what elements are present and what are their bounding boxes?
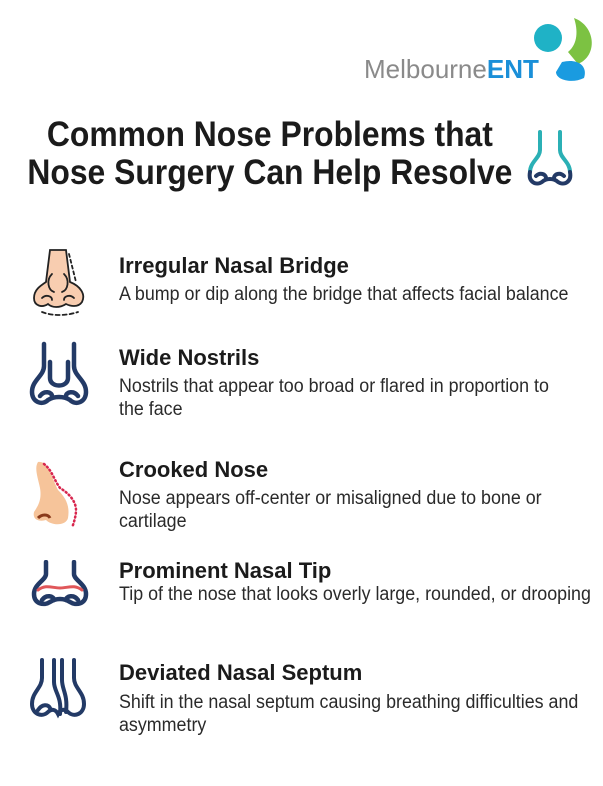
- icon: prominent tip: [32, 560, 88, 606]
- item 1 text: A bump or dip along the bridge that affects facial balance: [119, 284, 568, 305]
- item 2 text: Nostrils that appear too broad or flared in proportion to the face: [119, 376, 549, 420]
- title: Common Nose Problems that: [47, 115, 493, 154]
- icon: irregular bridge: [33, 249, 84, 316]
- item 4 heading: Prominent Nasal Tip: [119, 558, 331, 583]
- item 2 heading: Wide Nostrils: [119, 345, 259, 370]
- title: [27, 115, 512, 192]
- icon: wide nostrils: [30, 342, 88, 406]
- item 3 text: Nose appears off-center or misaligned due to bone or cartilage: [119, 488, 542, 532]
- title: Nose Surgery Can Help Resolve: [27, 153, 512, 192]
- icon: title nose: [528, 130, 572, 186]
- icon: deviated septum: [30, 658, 86, 718]
- item 4 text: Tip of the nose that looks overly large, rounded, or drooping: [119, 584, 591, 605]
- item 5 heading: Deviated Nasal Septum: [119, 660, 362, 685]
- icon: crooked nose: [34, 462, 78, 526]
- logo: [364, 18, 592, 82]
- item 5 text: Shift in the nasal septum causing breathing difficulties and asymmetry: [119, 692, 578, 736]
- item 3 heading: Crooked Nose: [119, 457, 268, 482]
- item 1 heading: Irregular Nasal Bridge: [119, 253, 349, 278]
